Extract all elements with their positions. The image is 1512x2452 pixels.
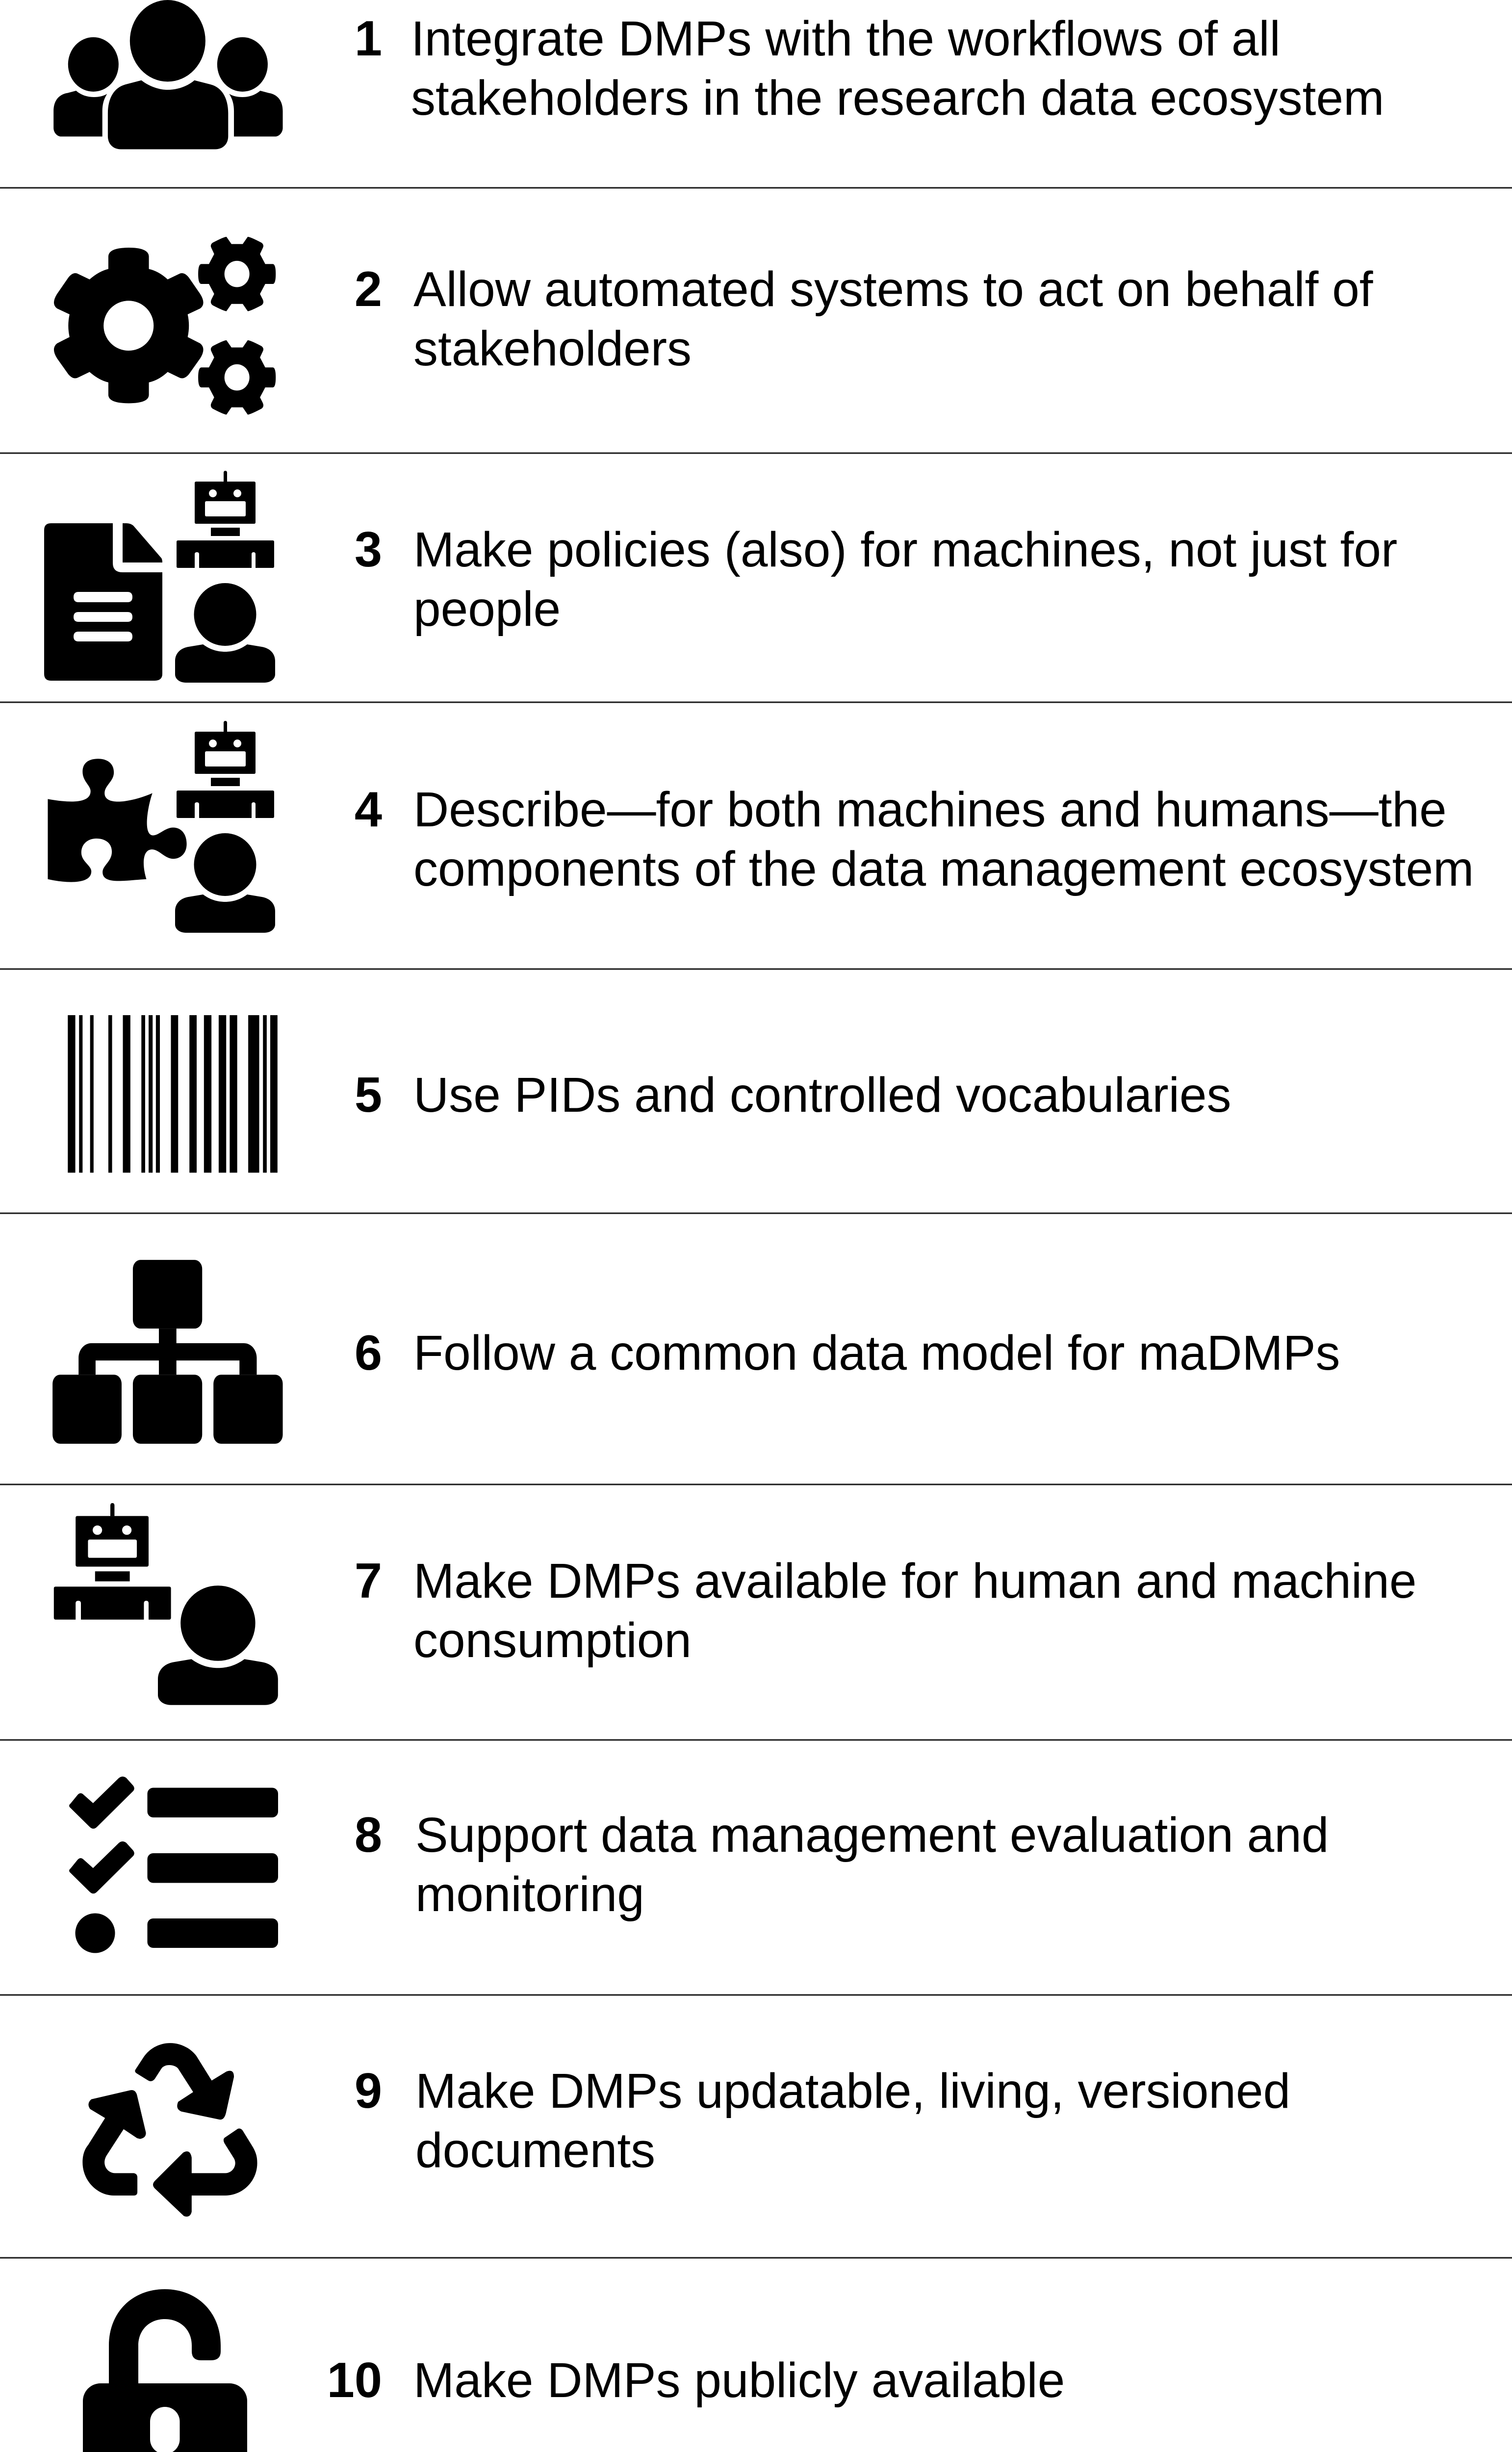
text 7: Make DMPs available for human and machine [413,1554,1416,1609]
row 6 [52,1260,1340,1444]
number 10: 10 [327,2353,382,2408]
row 5 [68,1015,1231,1173]
icon: hierarchy [52,1260,283,1444]
number 6: 6 [355,1326,382,1380]
icon: recycle arrows [82,2043,257,2217]
icon: robot and person [175,721,275,933]
icon: puzzle piece [48,759,187,882]
number 3: 3 [355,522,382,577]
text 7: consumption [413,1613,692,1668]
number 4: 4 [355,782,382,837]
text 10: Make DMPs publicly available [413,2353,1065,2408]
row 9 [82,2043,1290,2217]
number 5: 5 [355,1068,382,1123]
text 5: Use PIDs and controlled vocabularies [413,1068,1231,1123]
number 1: 1 [355,11,382,66]
icon: barcode [68,1015,278,1173]
number 7: 7 [355,1554,382,1609]
row 7 [54,1503,1416,1705]
text 9: Make DMPs updatable, living, versioned [415,2064,1290,2119]
row 1 [53,0,1384,149]
row 10 [83,2289,1065,2452]
text 9: documents [415,2123,655,2178]
icon: gears [54,237,276,414]
row 3 [44,471,1397,683]
text 8: monitoring [415,1867,644,1922]
text 6: Follow a common data model for maDMPs [413,1326,1340,1380]
row 2 [54,237,1373,414]
number 2: 2 [355,262,382,317]
text 1: stakeholders in the research data ecosystem [411,71,1384,126]
text 4: components of the data management ecosystem [413,842,1474,896]
text 3: people [413,582,561,637]
icon: open padlock [83,2289,247,2452]
icon: policy document [44,523,162,681]
text 2: Allow automated systems to act on behalf of [413,262,1373,317]
text 2: stakeholders [413,321,692,376]
icon: robot and person [54,1503,278,1705]
text 4: Describe—for both machines and humans—the [413,782,1447,837]
icon: group of people [53,0,283,149]
icon: robot and person [175,471,275,683]
number 8: 8 [355,1808,382,1863]
icon: checklist [69,1777,278,1953]
text 8: Support data management evaluation and [415,1808,1329,1863]
row 8 [69,1777,1329,1953]
number 9: 9 [355,2064,382,2119]
text 1: Integrate DMPs with the workflows of all [411,11,1281,66]
row 4 [48,721,1474,933]
text 3: Make policies (also) for machines, not just for [413,522,1397,577]
